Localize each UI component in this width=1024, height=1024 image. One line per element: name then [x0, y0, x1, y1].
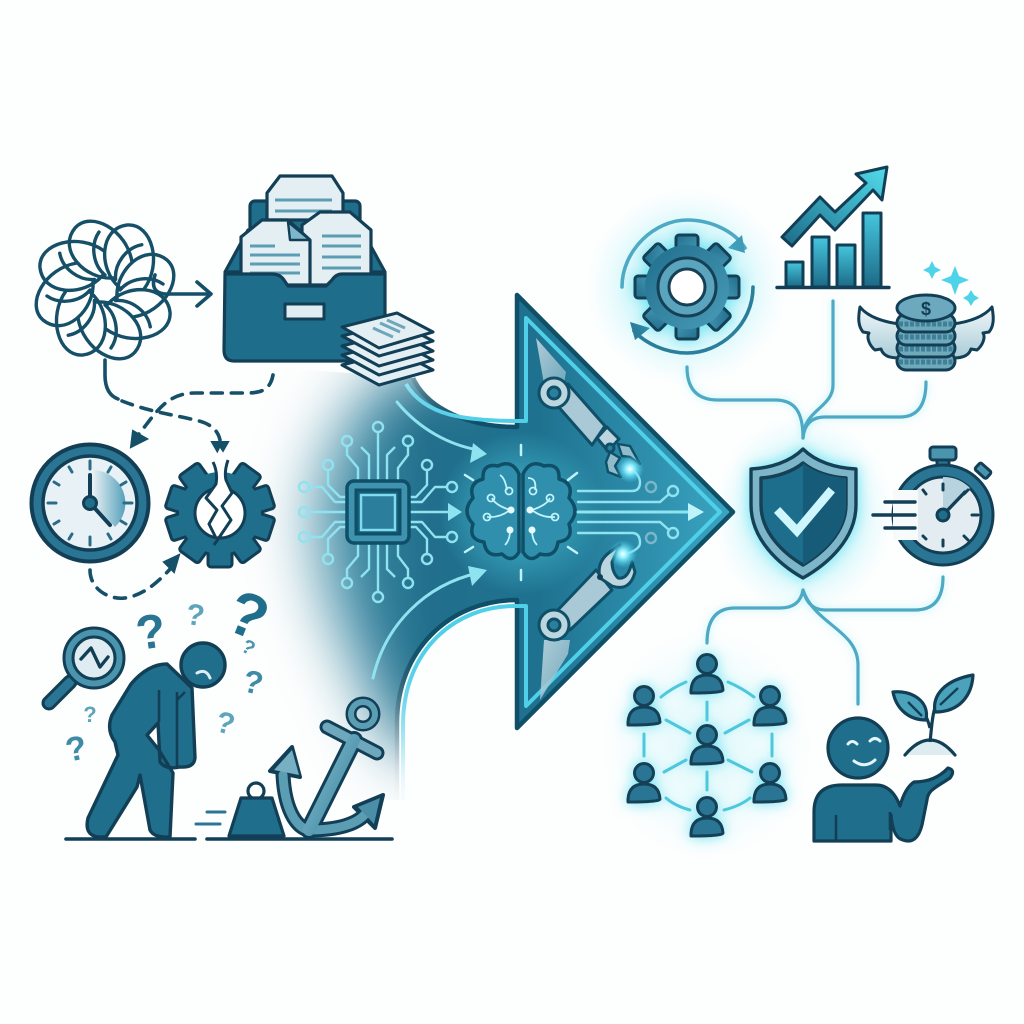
icon: process gear with cycle arrows [622, 220, 753, 353]
icon: flying coin stack [859, 261, 993, 370]
question marks: ? [240, 663, 267, 702]
connector lines bottom [707, 577, 943, 704]
icon: slumped person [87, 643, 225, 837]
question marks: ? [63, 729, 90, 770]
icon: shield with check [751, 449, 856, 578]
icon: flying coin stack: $ [921, 299, 931, 319]
arrow: knot to broken gear [105, 360, 228, 456]
dashed flow arrows [90, 360, 273, 598]
icon: happy person with sprout [814, 675, 973, 841]
curved inflow arrow bottom [373, 566, 487, 678]
icon: lower robot arm [539, 540, 637, 700]
icon: brain [465, 445, 577, 580]
icon: anchor [270, 702, 383, 830]
panel background glows [587, 189, 893, 860]
question marks: ? [83, 702, 97, 727]
icon: file drawer with documents [224, 176, 385, 361]
wings [859, 307, 993, 358]
icon: paper stack [342, 313, 433, 385]
arrow: clock to broken gear [90, 555, 179, 598]
sprout [893, 675, 973, 755]
output traces [578, 468, 704, 555]
question marks: ? [184, 598, 207, 633]
person nodes [628, 654, 786, 836]
infographic canvas [30, 166, 995, 850]
icon: weight [196, 783, 284, 836]
icon: tangled knot [31, 216, 179, 364]
icon: microchip with circuit traces [299, 422, 462, 602]
brain glow [439, 431, 603, 595]
ground lines [66, 837, 392, 841]
curved inflow arrow top [397, 402, 487, 463]
icon: stopwatch [873, 447, 993, 565]
arrow: drawer to clock [131, 375, 273, 447]
icon: bar chart with rising arrow [777, 167, 889, 288]
sparkles [923, 261, 979, 306]
question marks: ? [237, 635, 259, 660]
icon: people network [628, 654, 786, 836]
arrow: knot to drawer [153, 275, 211, 306]
icon: broken gear [165, 448, 275, 567]
coins [897, 314, 955, 370]
question marks [63, 577, 278, 770]
network links [644, 682, 772, 810]
central transformation arrow [266, 292, 736, 798]
question marks: ? [212, 706, 238, 742]
connector lines top [687, 301, 926, 438]
icon: magnifying glass with zigzag [49, 628, 124, 703]
question marks: ? [217, 577, 278, 655]
icon: wall clock [32, 444, 148, 562]
question marks: ? [133, 604, 169, 661]
arrow body [266, 292, 736, 798]
icon: upper robot arm [536, 338, 644, 483]
